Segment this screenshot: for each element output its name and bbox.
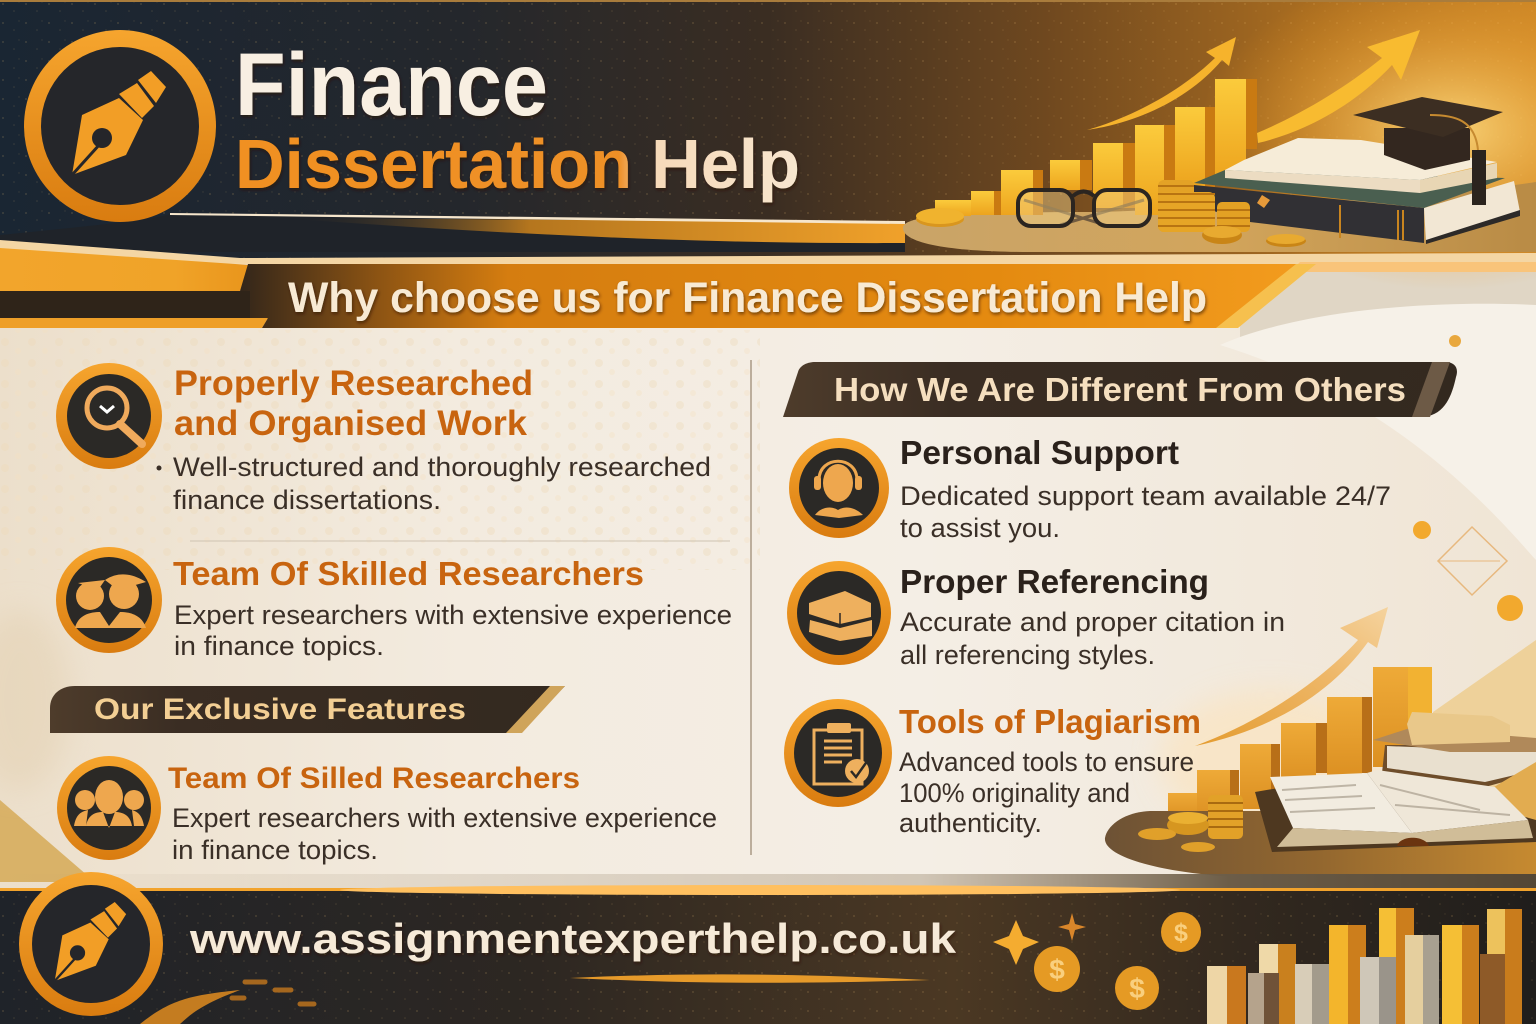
feature: tools of plagiarism xyxy=(784,699,1201,838)
center divider xyxy=(750,360,752,855)
description: in finance topics. xyxy=(174,631,384,661)
dark bottom book xyxy=(1194,185,1424,243)
header sweeping lines xyxy=(0,213,905,252)
gold wedge behind open book xyxy=(1494,762,1536,832)
description xyxy=(156,452,711,515)
header background xyxy=(0,0,1536,290)
arrow xyxy=(1195,607,1388,746)
description: Accurate and proper citation in xyxy=(900,607,1285,637)
heading: Personal Support xyxy=(900,434,1179,471)
title: Finance xyxy=(235,34,548,134)
feature: team of silled researchers xyxy=(57,756,717,865)
description: in finance topics. xyxy=(172,835,378,865)
footer logo: pen nib xyxy=(19,872,163,1016)
description xyxy=(174,600,732,661)
rising arrow large xyxy=(1257,30,1420,143)
heading: Properly Researched xyxy=(174,364,533,403)
feature: personal support xyxy=(789,434,1391,543)
heading: and Organised Work xyxy=(174,404,528,443)
icon: dollar coins: $ xyxy=(1049,954,1065,985)
feature: team of skilled researchers xyxy=(56,547,732,661)
title: Dissertation Help xyxy=(235,125,800,203)
description: Advanced tools to ensure xyxy=(899,747,1194,777)
heading xyxy=(174,364,533,443)
description: Expert researchers with extensive experience xyxy=(172,803,717,833)
icon: team xyxy=(57,756,161,860)
title xyxy=(235,34,800,203)
heading: Tools of Plagiarism xyxy=(899,703,1201,740)
description xyxy=(899,747,1194,838)
icon: sparkles xyxy=(993,913,1086,965)
bottom book pages xyxy=(1424,181,1520,242)
logo: pen nib xyxy=(24,30,216,222)
icon: dollar coins xyxy=(1034,912,1201,1010)
banner: our exclusive features: Our Exclusive Features xyxy=(94,693,466,726)
description: Dedicated support team available 24/7 xyxy=(900,481,1391,511)
open book xyxy=(1255,773,1536,852)
divider xyxy=(190,540,730,542)
icon: books xyxy=(787,561,891,665)
feature: properly researched xyxy=(56,363,711,515)
heading: Team Of Silled Researchers xyxy=(168,762,580,795)
platform xyxy=(1105,811,1536,876)
banner: how we are different xyxy=(783,362,1457,417)
footer xyxy=(0,874,1536,1024)
rising bars xyxy=(935,79,1257,216)
platform xyxy=(903,182,1536,252)
rising arrow small xyxy=(1087,37,1236,130)
illustration: finance chart, books and graduation cap xyxy=(903,30,1536,252)
description: finance dissertations. xyxy=(173,485,441,515)
heading: Proper Referencing xyxy=(900,563,1209,600)
banner heading: Why choose us for Finance Dissertation Help xyxy=(288,274,1207,322)
description xyxy=(172,803,717,865)
coin stacks xyxy=(916,180,1306,247)
description: Well-structured and thoroughly researched xyxy=(173,452,711,482)
decorative coins and diamond xyxy=(1413,335,1523,621)
description: all referencing styles. xyxy=(900,640,1155,670)
bars xyxy=(1168,667,1432,818)
feature: proper referencing xyxy=(787,561,1285,670)
icon: dollar coins: $ xyxy=(1174,919,1188,947)
heading: Team Of Skilled Researchers xyxy=(173,555,644,592)
description: Expert researchers with extensive experience xyxy=(174,600,732,630)
graduation cap xyxy=(1384,128,1470,170)
top band strips xyxy=(0,240,1536,328)
icon: headset agent xyxy=(789,438,889,538)
illustration: lower right chart, books, coins xyxy=(1105,607,1536,876)
website url: www.assignmentexperthelp.co.uk xyxy=(189,915,957,962)
footer bar chart xyxy=(1207,908,1522,1024)
icon: researchers xyxy=(56,547,162,653)
icon: clipboard check xyxy=(784,699,892,807)
icon: dollar coins: $ xyxy=(1129,973,1145,1004)
description xyxy=(900,481,1391,543)
description: authenticity. xyxy=(899,808,1042,838)
description: 100% originality and xyxy=(899,778,1130,808)
coins xyxy=(1138,795,1243,852)
icon: magnifying glass xyxy=(56,363,162,469)
description: to assist you. xyxy=(900,513,1060,543)
banner: our exclusive features xyxy=(50,686,565,733)
banner: why choose us xyxy=(240,264,1316,328)
upper book xyxy=(1382,745,1536,787)
page background xyxy=(0,260,1536,900)
cream top book xyxy=(1225,170,1420,193)
banner: how we are different: How We Are Different From Others xyxy=(834,371,1406,408)
glasses xyxy=(1018,190,1150,226)
description xyxy=(900,607,1285,670)
